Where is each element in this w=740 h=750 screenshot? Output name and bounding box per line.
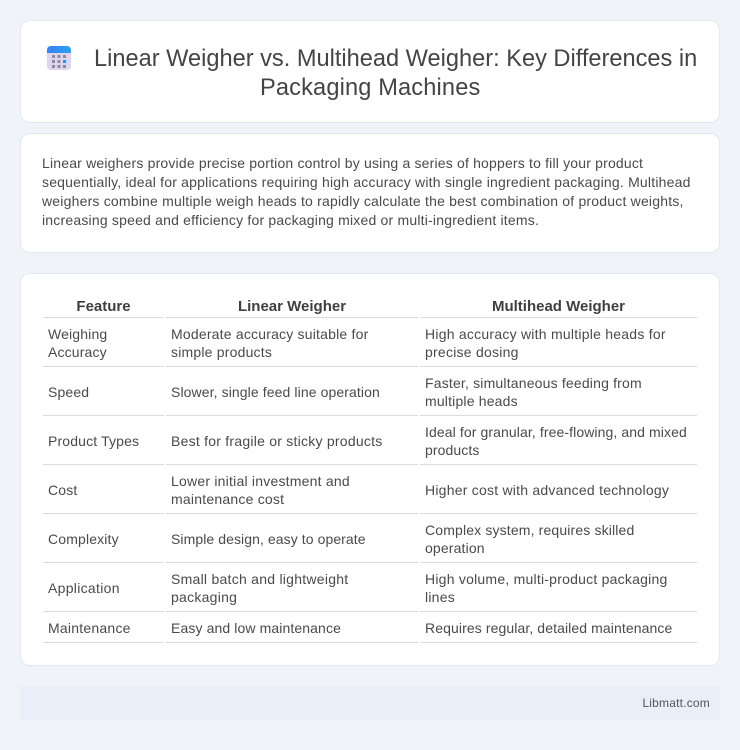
header panel [20, 20, 720, 123]
row: complexity: operation [425, 540, 485, 556]
footer bar [20, 686, 720, 720]
title [94, 46, 697, 101]
row: application: High volume, multi-product packaging [425, 571, 668, 587]
row: weighing accuracy: High accuracy with multiple heads for [425, 326, 666, 342]
intro paragraph: sequentially, ideal for applications requiring high accuracy with single ingredient packaging. Multihead [42, 174, 691, 190]
title: Linear Weigher vs. Multihead Weigher: Key Differences in [94, 46, 697, 72]
row: complexity: Complexity [48, 531, 119, 547]
row: cost: Cost [48, 482, 77, 498]
row: product types [48, 424, 687, 458]
intro paragraph: Linear weighers provide precise portion control by using a series of hoppers to fill your product [42, 155, 643, 171]
column headers [76, 298, 625, 315]
column headers: Multihead Weigher [492, 298, 625, 315]
row: speed: Slower, single feed line operation [171, 384, 380, 400]
row: weighing accuracy [48, 326, 666, 360]
row: cost [48, 473, 669, 507]
column headers: Linear Weigher [238, 298, 346, 315]
intro paragraph: increasing speed and efficiency for packaging mixed or multi-ingredient items. [42, 212, 539, 228]
comparison table panel [20, 273, 720, 666]
row: application: lines [425, 589, 455, 605]
row: maintenance: Requires regular, detailed maintenance [425, 620, 672, 636]
row: speed: Faster, simultaneous feeding from [425, 375, 642, 391]
comparison table [43, 298, 697, 643]
row: maintenance [48, 620, 672, 636]
column headers: Feature [76, 298, 131, 315]
row: speed: Speed [48, 384, 89, 400]
intro paragraph [42, 155, 691, 228]
row: product types: products [425, 442, 480, 458]
row: maintenance: Easy and low maintenance [171, 620, 341, 636]
row: complexity: Simple design, easy to operate [171, 531, 366, 547]
title: Packaging Machines [260, 75, 480, 101]
row: speed [48, 375, 642, 409]
row: application: Application [48, 580, 120, 596]
row: application [48, 571, 668, 605]
row: application: Small batch and lightweight [171, 571, 348, 587]
row: product types: Ideal for granular, free-flowing, and mixed [425, 424, 687, 440]
row: weighing accuracy: precise dosing [425, 344, 519, 360]
footer credit: Libmatt.com [642, 696, 710, 710]
row: complexity [48, 522, 634, 556]
intro text panel [20, 133, 720, 253]
row: speed: multiple heads [425, 393, 518, 409]
row: weighing accuracy: Weighing [48, 326, 107, 342]
row: cost: Higher cost with advanced technology [425, 482, 669, 498]
row: maintenance: Maintenance [48, 620, 131, 636]
row: weighing accuracy: Moderate accuracy suitable for [171, 326, 368, 342]
row: product types: Product Types [48, 433, 139, 449]
row: product types: Best for fragile or sticky products [171, 433, 382, 449]
row: weighing accuracy: Accuracy [48, 344, 107, 360]
row: cost: maintenance cost [171, 491, 284, 507]
icon: calendar [47, 46, 71, 70]
row: cost: Lower initial investment and [171, 473, 350, 489]
row: complexity: Complex system, requires skilled [425, 522, 634, 538]
intro paragraph: weighers combine multiple weigh heads to rapidly calculate the best combination of product weights, [42, 193, 684, 209]
row: weighing accuracy: simple products [171, 344, 272, 360]
row: application: packaging [171, 589, 237, 605]
